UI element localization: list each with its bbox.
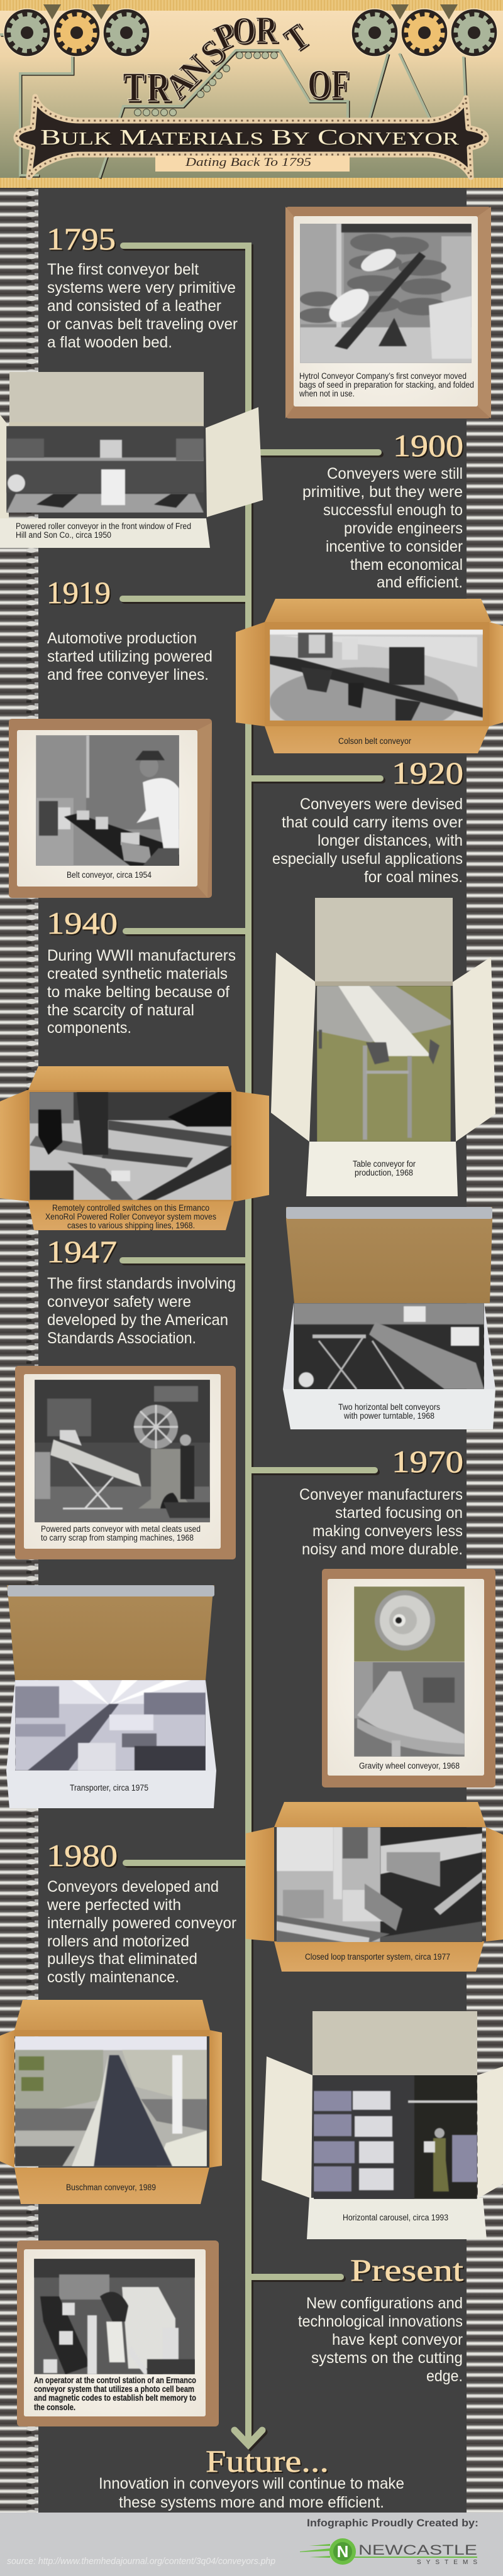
title word: TRANSPORT: R xyxy=(256,9,278,50)
text: 1900: and efficient. xyxy=(377,574,463,591)
conveyor photo xyxy=(354,1662,465,1757)
photo xyxy=(35,1380,210,1522)
caption: Powered parts conveyor with metal cleats used xyxy=(41,1524,201,1534)
text: 1970 xyxy=(299,1486,463,1558)
text: 1900: incentive to consider xyxy=(326,538,463,555)
photo box: transporter xyxy=(6,1585,216,1808)
heading: 1795: 1795 xyxy=(47,221,116,256)
caption: Closed loop transporter system, circa 1977 xyxy=(305,1952,450,1962)
caption xyxy=(34,2376,196,2412)
photo box: Fred Hill xyxy=(0,372,263,548)
caption: Colson belt conveyor xyxy=(338,736,411,746)
caption: Gravity wheel conveyor, 1968 xyxy=(359,1761,460,1771)
title word: OF xyxy=(308,62,350,107)
right metal mesh band xyxy=(467,188,503,2513)
text: 1940: During WWII manufacturers xyxy=(47,947,236,964)
photo xyxy=(277,1827,482,1942)
ornate title banner xyxy=(16,97,486,177)
caption xyxy=(45,1203,216,1230)
text: 1920: for coal mines. xyxy=(364,868,463,886)
photo box: Buschman xyxy=(0,2000,222,2204)
subtitle plate xyxy=(155,156,350,172)
text: 1970: noisy and more durable. xyxy=(302,1541,463,1558)
photo box: operator xyxy=(17,2240,219,2426)
photo xyxy=(317,986,451,1142)
title word: TRANSPORT: N xyxy=(172,47,216,92)
conveyor rollers xyxy=(135,52,278,116)
title word: TRANSPORT: O xyxy=(233,9,255,51)
caption: Belt conveyor, circa 1954 xyxy=(67,870,152,880)
caption: An operator at the control station of an Ermanco xyxy=(34,2376,196,2385)
text: 1919: Automotive production xyxy=(47,630,197,647)
gears right xyxy=(351,9,497,57)
caption: Buschman conveyor, 1989 xyxy=(66,2183,156,2192)
text: 1795 xyxy=(47,261,238,351)
text: 1900: primitive, but they were xyxy=(302,483,463,501)
title word: TRANSPORT: T xyxy=(277,17,316,60)
gears left xyxy=(4,9,150,57)
caption: XenoRol Powered Roller Conveyor system moves xyxy=(45,1212,216,1221)
heading: Future: Future... xyxy=(206,2443,329,2479)
caption: cases to various shipping lines, 1968. xyxy=(67,1221,195,1230)
photo xyxy=(6,426,204,513)
text: Present: have kept conveyor xyxy=(332,2331,463,2349)
caption: Two horizontal belt conveyors xyxy=(338,1402,440,1412)
text: 1980: costly maintenance. xyxy=(47,1968,179,1986)
heading: 1970: 1970 xyxy=(392,1444,463,1479)
text: 1795: or canvas belt traveling over xyxy=(47,315,238,333)
text: Present: technological innovations xyxy=(298,2313,463,2330)
left metal mesh band xyxy=(0,188,38,2513)
photo box: closed loop xyxy=(246,1802,503,1972)
text: 1970: making conveyers less xyxy=(312,1522,463,1540)
header xyxy=(0,0,503,188)
photo xyxy=(270,630,483,721)
wheel photo xyxy=(354,1586,465,1662)
text: Present: systems on the cutting xyxy=(311,2349,463,2367)
title word: TRANSPORT: A xyxy=(157,62,201,107)
caption: Powered roller conveyor in the front window of Fred xyxy=(16,521,191,531)
text: 1795: and consisted of a leather xyxy=(47,297,221,315)
logo: Newcastle Systems: SYSTEMS xyxy=(417,2559,477,2566)
text: 1980: were perfected with xyxy=(47,1896,181,1914)
text: Future xyxy=(99,2475,404,2511)
title word: TRANSPORT xyxy=(123,9,316,110)
caption: Horizontal carousel, circa 1993 xyxy=(343,2213,448,2222)
caption xyxy=(41,1524,201,1542)
text: 1920 xyxy=(272,795,463,886)
caption: Remotely controlled switches on this Ermanco xyxy=(52,1203,209,1213)
text: 1980 xyxy=(47,1878,236,1986)
photo box: Ermanco switches xyxy=(0,1066,269,1230)
caption xyxy=(16,521,191,540)
heading: 1919: 1919 xyxy=(47,575,111,610)
caption: Hytrol Conveyor Company’s first conveyor moved xyxy=(299,371,467,381)
text: 1920: Conveyers were devised xyxy=(300,795,463,813)
logo: Newcastle Systems: NEWCASTLE xyxy=(358,2542,477,2558)
photo box: table conveyor xyxy=(271,898,495,1196)
caption: with power turntable, 1968 xyxy=(343,1411,434,1421)
caption: Table conveyor for xyxy=(353,1159,416,1169)
logo: Newcastle Systems xyxy=(300,2538,477,2566)
caption: to carry scrap from stamping machines, 1968 xyxy=(41,1533,194,1542)
heading: 1940: 1940 xyxy=(47,905,118,941)
text: Present: edge. xyxy=(426,2367,463,2385)
text: 1920: that could carry items over xyxy=(282,814,463,831)
caption: when not in use. xyxy=(299,389,355,398)
text: 1900: them economical xyxy=(350,556,463,574)
caption: the console. xyxy=(34,2403,75,2412)
photo xyxy=(36,735,179,866)
caption: conveyor system that utilizes a photo cell beam xyxy=(34,2384,194,2394)
caption: Hill and Son Co., circa 1950 xyxy=(16,530,111,540)
photo box: Colson xyxy=(236,599,503,753)
text: 1795: systems were very primitive xyxy=(47,279,236,297)
text: Future: these systems more and more efficient. xyxy=(119,2494,384,2511)
central timeline with branches xyxy=(123,246,382,2447)
caption: production, 1968 xyxy=(355,1168,413,1177)
text: Present: New configurations and xyxy=(306,2295,463,2312)
photo xyxy=(15,1680,206,1771)
text: Present xyxy=(298,2295,463,2385)
text: 1940: to make belting because of xyxy=(47,983,229,1001)
heading: 1920: 1920 xyxy=(392,755,463,790)
text: 1947: The first standards involving xyxy=(47,1275,236,1292)
subtitle: Dating Back To 1795 xyxy=(185,156,311,169)
credit heading: Infographic Proudly Created by: xyxy=(307,2517,478,2529)
text: 1947 xyxy=(47,1275,236,1347)
title word: TRANSPORT: T xyxy=(123,63,145,109)
text: 1970: started focusing on xyxy=(335,1504,463,1522)
text: 1980: internally powered conveyor xyxy=(47,1914,236,1932)
title word: OF: F xyxy=(331,62,350,107)
caption: and magnetic codes to establish belt memory to xyxy=(34,2393,196,2403)
text: 1919: started utilizing powered xyxy=(47,648,213,665)
text: 1900: Conveyers were still xyxy=(327,465,463,483)
photo xyxy=(314,2075,477,2199)
text: Future: Innovation in conveyors will continue to make xyxy=(99,2475,404,2492)
text: 1900: successful enough to xyxy=(323,501,463,519)
caption: bags of seed in preparation for stacking, and folded xyxy=(299,380,474,390)
footer xyxy=(0,2513,503,2576)
caption xyxy=(353,1159,416,1177)
caption: Transporter, circa 1975 xyxy=(70,1783,148,1793)
photo xyxy=(34,2259,195,2374)
text: 1920: especially useful applications xyxy=(272,850,463,868)
heading: 1980: 1980 xyxy=(47,1838,118,1873)
text: 1920: longer distances, with xyxy=(318,832,463,849)
photo box: Hytrol xyxy=(285,207,491,418)
conveyor lines xyxy=(1,35,467,178)
text: 1919: and free conveyer lines. xyxy=(47,666,209,684)
photo xyxy=(294,1303,484,1389)
text: 1940: created synthetic materials xyxy=(47,965,228,983)
heading: 1947: 1947 xyxy=(47,1234,117,1269)
text: 1947: developed by the American xyxy=(47,1311,228,1329)
title word: TRANSPORT: S xyxy=(193,31,232,74)
title word: OF: O xyxy=(308,62,331,107)
source: source: http://www.themhedajournal.org/content/3q04/conveyors.php xyxy=(7,2556,275,2567)
title word: TRANSPORT: R xyxy=(146,64,171,110)
text: 1980: pulleys that eliminated xyxy=(47,1950,197,1968)
text: 1980: rollers and motorized xyxy=(47,1933,189,1950)
text: 1795: a flat wooden bed. xyxy=(47,334,172,351)
text: 1940 xyxy=(47,947,236,1037)
photo box: two horizontal belts xyxy=(283,1207,495,1429)
text: 1900: provide engineers xyxy=(344,520,463,537)
heading: 1900: 1900 xyxy=(393,428,463,463)
title word: TRANSPORT: P xyxy=(208,14,243,58)
heading: Present: Present xyxy=(350,2252,463,2288)
text: 1947: Standards Association. xyxy=(47,1329,196,1347)
text: 1919 xyxy=(47,630,213,684)
banner title: B ULK M ATERIALS B Y C ONVEYOR xyxy=(40,125,459,150)
text: 1900 xyxy=(302,465,463,591)
photo xyxy=(300,224,472,363)
text: 1970: Conveyer manufacturers xyxy=(299,1486,463,1504)
icon: gear triangles xyxy=(43,4,458,19)
photo box: horizontal carousel xyxy=(262,2011,503,2239)
photo box: powered parts xyxy=(15,1366,236,1559)
caption xyxy=(338,1402,440,1421)
text: 1947: conveyor safety were xyxy=(47,1293,191,1311)
text: 1980: Conveyors developed and xyxy=(47,1878,219,1896)
photo box: belt conveyor xyxy=(9,719,212,898)
caption xyxy=(299,371,474,398)
text: 1795: The first conveyor belt xyxy=(47,261,199,278)
text: 1940: components. xyxy=(47,1019,131,1037)
logo: Newcastle Systems: N xyxy=(337,2542,348,2561)
photo box: gravity wheel xyxy=(322,1569,495,1787)
photo xyxy=(15,2036,207,2166)
photo xyxy=(30,1092,231,1200)
text: 1940: the scarcity of natural xyxy=(47,1001,194,1019)
